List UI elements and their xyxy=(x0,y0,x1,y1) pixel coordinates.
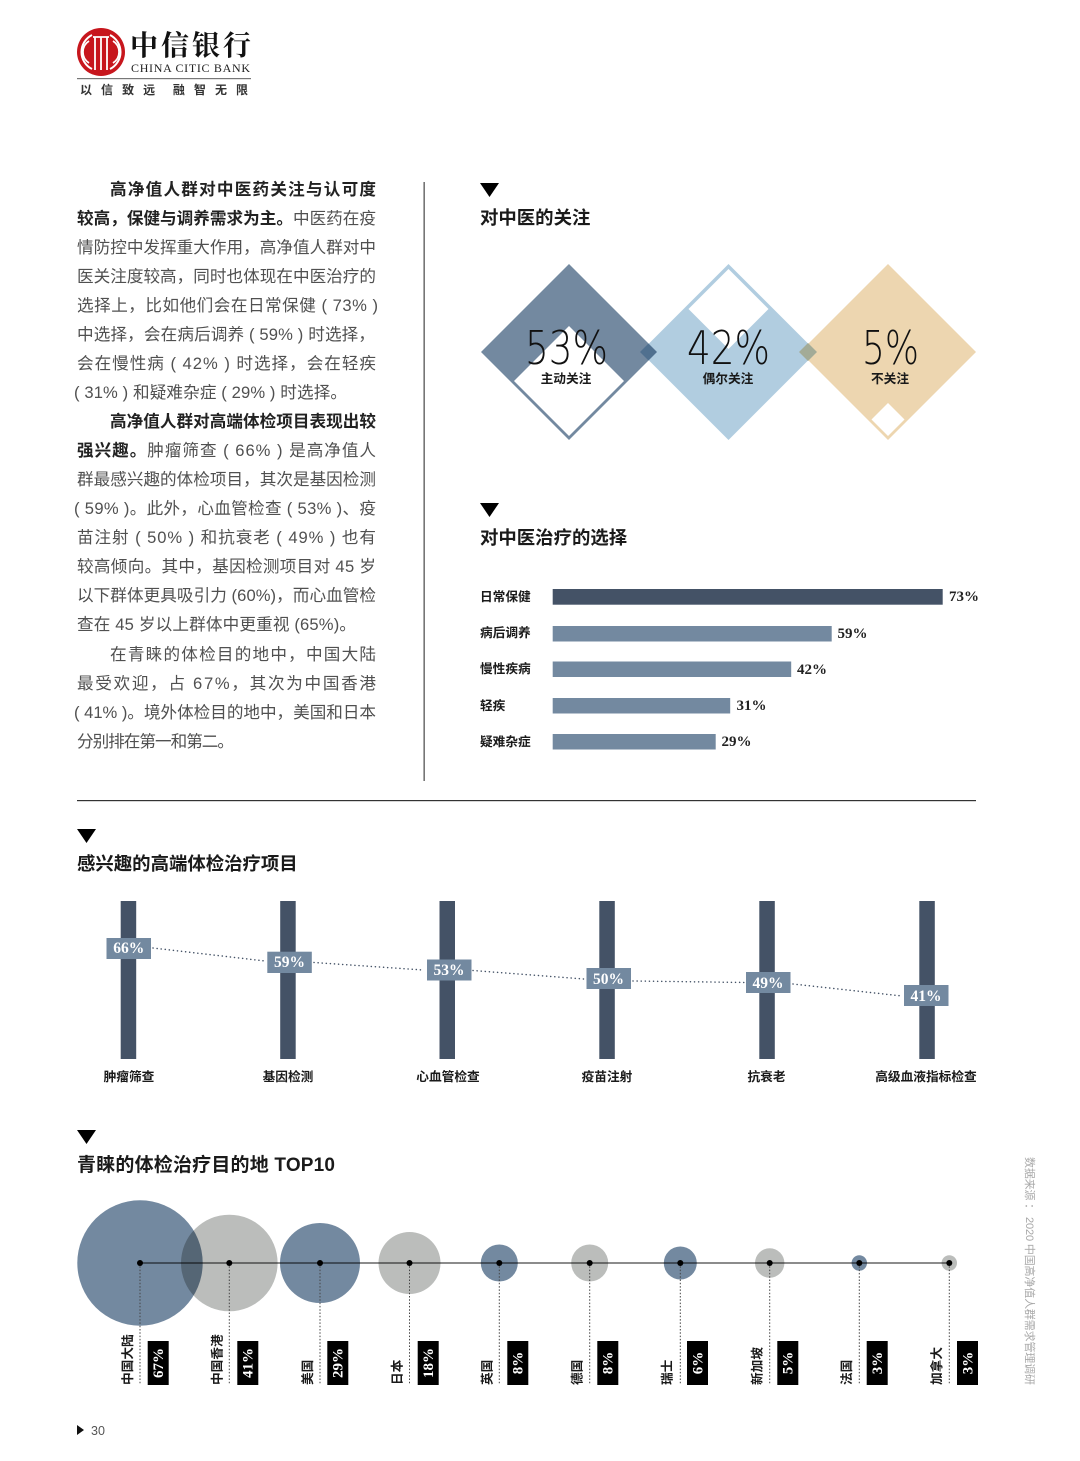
page number xyxy=(77,1424,105,1438)
destination: Singapore 5%: 5% xyxy=(781,1352,797,1374)
bar: minor illness 31% xyxy=(480,698,766,714)
bar: difficult illness 29%: 疑难杂症 xyxy=(480,734,531,749)
column: cardiovascular 53%: 心血管检查 xyxy=(416,1069,480,1084)
text block: analysis paragraphs: 较高，保健与调养需求为主。中医药在疫 xyxy=(77,208,376,228)
page number: 30 xyxy=(91,1424,105,1438)
destination: USA 29%: 29% xyxy=(331,1348,347,1378)
destination: UK 8%: 英国 xyxy=(480,1360,494,1385)
column: vaccination 50% xyxy=(582,901,633,1084)
destination: Canada 3%: 3% xyxy=(960,1352,976,1374)
bar: difficult illness 29% xyxy=(480,734,752,750)
column: blood markers 41%: 高级血液指标检查 xyxy=(875,1069,977,1084)
section: treatment choice xyxy=(480,503,628,548)
destination: Japan 18%: 日本 xyxy=(390,1359,404,1385)
destination: Singapore 5%: 新加坡 xyxy=(750,1347,764,1385)
destination: USA 29% xyxy=(300,1341,348,1385)
destination: Singapore 5% xyxy=(750,1341,798,1385)
destination: UK 8% xyxy=(480,1341,528,1385)
text block: analysis paragraphs: ( 41% )。境外体检目的地中，美国和日本 xyxy=(74,703,376,722)
heading: high-end check-ups: 感兴趣的高端体检治疗项目 xyxy=(77,853,298,874)
destination: Switzerland 6%: 6% xyxy=(690,1352,706,1374)
destination: Germany 8% xyxy=(570,1341,618,1385)
column: vaccination 50%: 疫苗注射 xyxy=(582,1069,633,1084)
text block: analysis paragraphs: 医关注度较高，同时也体现在中医治疗的 xyxy=(77,267,376,286)
destination: Germany 8%: 8% xyxy=(601,1352,617,1374)
destination: Mainland China 67%: 中国大陆 xyxy=(120,1334,135,1385)
destination: Mainland China 67%: 67% xyxy=(151,1348,167,1378)
section: attention to TCM xyxy=(480,183,590,228)
text block: analysis paragraphs: 高净值人群对高端体检项目表现出较 xyxy=(110,411,376,431)
destination: Japan 18% xyxy=(390,1341,439,1385)
bar: post-illness 59%: 病后调养 xyxy=(480,625,531,640)
destination: Hong Kong 41%: 41% xyxy=(241,1348,257,1378)
column: cardiovascular 53% xyxy=(416,901,480,1084)
destination: Hong Kong 41% xyxy=(210,1334,258,1385)
diamond: 42% occasional attention: 42% xyxy=(687,321,770,375)
destination: Canada 3% xyxy=(929,1341,978,1385)
chart: check-up items lollipop columns xyxy=(104,901,977,1084)
bar: minor illness 31%: 31% xyxy=(736,698,766,714)
text block: analysis paragraphs: 较高倾向。其中，基因检测项目对 45 岁 xyxy=(77,557,376,576)
bar: difficult illness 29%: 29% xyxy=(722,734,752,750)
destination: Canada 3%: 加拿大 xyxy=(929,1347,944,1385)
bar: chronic 42%: 42% xyxy=(797,662,827,678)
destination: Germany 8%: 德国 xyxy=(570,1360,584,1385)
heading: treatment choice: 对中医治疗的选择 xyxy=(480,527,628,548)
column: gene testing 59%: 59% xyxy=(274,954,305,971)
destination: Switzerland 6%: 瑞士 xyxy=(660,1359,674,1385)
section: destinations xyxy=(77,1130,335,1176)
text block: analysis paragraphs: 强兴趣。肿瘤筛查 ( 66% ) 是高净值人 xyxy=(77,441,376,460)
diamond: 53% active attention xyxy=(481,264,657,440)
logo wordmark: 中信银行 xyxy=(130,24,251,64)
bar: daily care 73%: 73% xyxy=(949,589,979,605)
diamond: 42% occasional attention xyxy=(640,264,816,440)
diamond: 5% no attention: 不关注 xyxy=(871,371,909,386)
bar: daily care 73% xyxy=(480,589,979,605)
text block: analysis paragraphs: 会在慢性病 ( 42% ) 时选择，会在轻疾 xyxy=(77,353,376,373)
chart: destinations bubbles xyxy=(77,1200,978,1385)
section: high-end check-ups xyxy=(77,829,298,874)
destination: UK 8%: 8% xyxy=(511,1352,527,1374)
text block: analysis paragraphs xyxy=(74,179,378,751)
diamond: 53% active attention: 53% xyxy=(525,321,608,375)
bubbles xyxy=(77,1200,957,1326)
column: cardiovascular 53%: 53% xyxy=(434,962,464,979)
diamond: 5% no attention: 5% xyxy=(862,321,919,375)
icon: section triangle xyxy=(77,829,96,843)
destination: France 3%: 法国 xyxy=(839,1360,854,1385)
text block: analysis paragraphs: ( 31% ) 和疑难杂症 ( 29% ) 时选择。 xyxy=(74,383,347,402)
text block: analysis paragraphs: 分别排在第一和第二。 xyxy=(77,732,234,751)
column: gene testing 59% xyxy=(263,901,313,1084)
dotted leaders and nodes xyxy=(137,1260,952,1385)
column: tumor screening 66% xyxy=(104,901,155,1084)
column: blood markers 41%: 41% xyxy=(910,988,942,1005)
icon: section triangle xyxy=(77,1130,96,1144)
text block: analysis paragraphs: 中选择，会在病后调养 ( 59% ) 时选择， xyxy=(77,325,375,344)
bar: minor illness 31%: 轻疾 xyxy=(480,698,506,713)
bar: chronic 42% xyxy=(480,661,827,678)
column: anti-aging 49% xyxy=(746,901,790,1084)
text block: analysis paragraphs: ( 59% )。此外，心血管检查 ( 53% )、疫 xyxy=(74,499,376,518)
column: anti-aging 49%: 49% xyxy=(752,975,784,992)
bar: daily care 73%: 日常保健 xyxy=(480,589,531,604)
icon: section triangle xyxy=(480,503,499,517)
bar: post-illness 59%: 59% xyxy=(838,626,868,642)
heading: destinations top 10: 青睐的体检治疗目的地 TOP10 xyxy=(77,1153,335,1176)
text block: analysis paragraphs: 以下群体更具吸引力 (60%)，而心血管检 xyxy=(77,586,376,605)
logo: China CITIC Bank xyxy=(77,24,251,97)
destination: Hong Kong 41%: 中国香港 xyxy=(210,1334,224,1385)
column: tumor screening 66%: 肿瘤筛查 xyxy=(104,1069,155,1084)
text block: analysis paragraphs: 高净值人群对中医药关注与认可度 xyxy=(110,179,376,199)
bar: post-illness 59% xyxy=(480,625,868,642)
destination: Mainland China 67% xyxy=(120,1334,169,1385)
logo English name: CHINA CITIC BANK xyxy=(131,61,250,75)
chart: TCM treatment horizontal bars xyxy=(480,589,979,750)
text block: analysis paragraphs: 查在 45 岁以上群体中更重视 (65%)。 xyxy=(77,615,356,634)
bar: chronic 42%: 慢性疾病 xyxy=(480,661,531,676)
text block: analysis paragraphs: 选择上，比如他们会在日常保健 ( 73% ) xyxy=(77,296,378,315)
text block: analysis paragraphs: 在青睐的体检目的地中，中国大陆 xyxy=(110,645,376,664)
icon: CITIC red circle xyxy=(77,28,125,76)
diamond: 53% active attention: 主动关注 xyxy=(541,371,592,386)
column: blood markers 41% xyxy=(875,901,977,1084)
diamond: 5% no attention xyxy=(799,264,976,440)
destination: France 3%: 3% xyxy=(870,1352,886,1374)
column: tumor screening 66%: 66% xyxy=(113,940,144,957)
source note: 数据来源 ： 2020 中国高净值人群需求管理调研 xyxy=(1023,1157,1037,1385)
heading: attention to TCM: 对中医的关注 xyxy=(480,207,590,228)
column: gene testing 59%: 基因检测 xyxy=(263,1069,313,1084)
text block: analysis paragraphs: 最受欢迎，占 67%，其次为中国香港 xyxy=(77,674,376,693)
axis line xyxy=(140,1262,949,1264)
dotted trend line xyxy=(153,948,902,996)
icon: section triangle xyxy=(480,183,499,197)
destination: France 3% xyxy=(839,1341,888,1385)
logo slogan: 以 信 致 远 融 智 无 限 xyxy=(80,82,248,97)
text block: analysis paragraphs: 群最感兴趣的体检项目，其次是基因检测 xyxy=(77,470,376,489)
diamond: 42% occasional attention: 偶尔关注 xyxy=(703,371,754,386)
chart: attention diamonds xyxy=(481,264,976,440)
destination: USA 29%: 美国 xyxy=(300,1360,315,1385)
text block: analysis paragraphs: 苗注射 ( 50% ) 和抗衰老 ( 49% ) 也有 xyxy=(77,528,376,547)
destination: Japan 18%: 18% xyxy=(421,1348,437,1378)
column: anti-aging 49%: 抗衰老 xyxy=(747,1069,786,1084)
column: vaccination 50%: 50% xyxy=(593,971,624,988)
destination: Switzerland 6% xyxy=(660,1341,708,1385)
text block: analysis paragraphs: 情防控中发挥重大作用，高净值人群对中 xyxy=(77,238,376,257)
